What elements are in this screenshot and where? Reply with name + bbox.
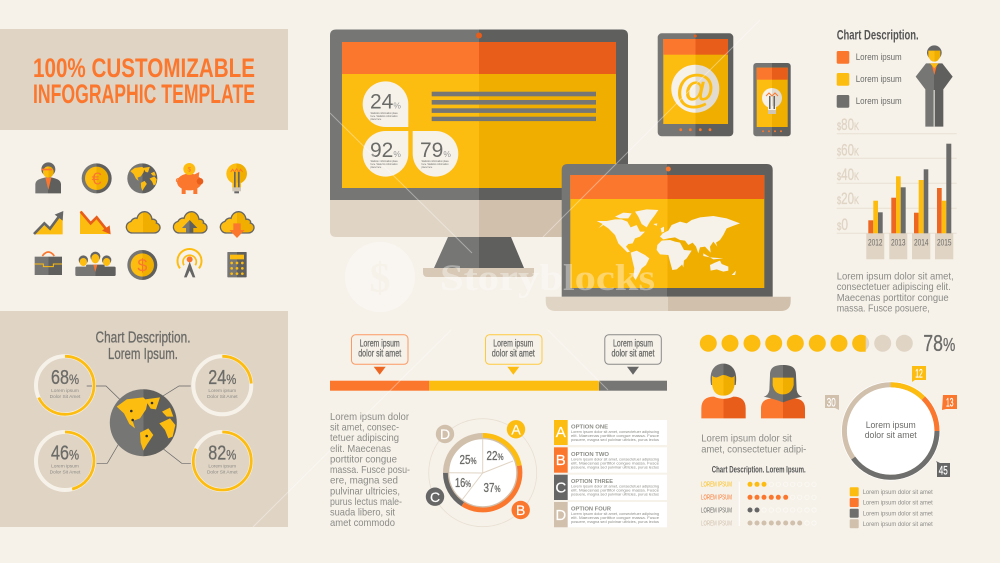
text block: chart description <box>837 270 954 314</box>
tag 30: 30 <box>827 398 836 410</box>
globe <box>110 389 177 456</box>
panel heading: Chart Description. <box>96 330 190 346</box>
icon: cloud upload <box>173 212 207 233</box>
ring legend: Lorem ipsum dolor sit amet <box>863 500 933 507</box>
y axis labels: $0 <box>837 215 848 234</box>
year label tabs: 2014 <box>914 238 928 248</box>
ring stat 82% <box>193 432 251 490</box>
option one: posuere, magna sed pulvinar ultricies, purus lectus <box>571 437 659 442</box>
ring stat 82%: Dolor Sit Amet <box>207 470 238 476</box>
ring legend: Lorem ipsum dolor sit amet <box>863 489 933 496</box>
ring segments <box>844 385 937 477</box>
rating row 1: LOREM IPSUM <box>701 482 732 489</box>
option four <box>554 502 667 527</box>
y axis labels <box>837 115 859 234</box>
option four: OPTION FOUR <box>571 506 611 512</box>
icon: dollar coin: $ <box>137 255 147 275</box>
panel heading <box>96 330 190 363</box>
title banner <box>0 29 288 130</box>
device: phone <box>753 63 791 136</box>
pie labels: 22% <box>486 448 504 463</box>
teardrop stat 79%: Statistics information place <box>422 160 450 163</box>
dot rating table: Chart Description. Lorem Ipsum. <box>712 465 806 476</box>
option three: elit. Maecenas porttitor congue massa. Fusce <box>571 488 659 492</box>
teardrop stat 79%: 79% <box>420 139 451 162</box>
tag 13: 13 <box>946 398 953 410</box>
rating row 4: LOREM IPSUM <box>701 521 732 528</box>
ring legend: Lorem ipsum dolor sit amet <box>863 521 933 528</box>
option one <box>554 420 667 445</box>
device: tablet <box>658 33 733 136</box>
icon grid <box>34 162 254 280</box>
ring stat 68%: Lorem ipsum <box>51 388 79 394</box>
ring stat 24%: 24% <box>208 367 236 389</box>
rating row 3: LOREM IPSUM <box>701 508 732 515</box>
teardrop stat 79% <box>413 131 458 177</box>
option one: OPTION ONE <box>571 424 608 430</box>
icon: team <box>75 252 116 276</box>
ring stat 82%: 82% <box>208 442 236 464</box>
watermark: Storyblocks <box>440 258 655 299</box>
icon: cloud download <box>220 212 254 238</box>
option one: elit. Maecenas porttitor congue massa. Fusce <box>571 433 659 438</box>
ring chart: Lorem ipsum <box>866 420 916 431</box>
callout: third: Lorem ipsum <box>613 338 653 350</box>
option three: Lorem ipsum dolor sit amet, consectetuer adipiscing <box>571 484 659 488</box>
teardrop stat 92%: 92% <box>370 139 401 162</box>
text block: left paragraph: massa. Fusce posu- <box>330 464 410 476</box>
teardrop stat 92% <box>363 131 408 177</box>
tag 13 <box>942 395 957 410</box>
text block: chart description: Lorem ipsum dolor sit amet, <box>837 270 954 282</box>
callout: first <box>352 335 408 375</box>
device: laptop <box>546 164 791 311</box>
badge D: D <box>440 426 450 442</box>
text block: left paragraph: ere, magna sed <box>330 475 398 487</box>
tag 45: 45 <box>939 466 948 478</box>
y axis labels: $20K <box>837 189 859 208</box>
year label tabs: 2013 <box>891 238 906 248</box>
panel: right chart legend: Chart Description. <box>837 26 919 42</box>
text block: people description <box>701 432 807 455</box>
option two: B <box>556 452 566 469</box>
ring stat 68%: Dolor Sit Amet <box>50 394 81 400</box>
callout: first: Lorem ipsum <box>360 338 400 350</box>
tag 12: 12 <box>915 368 923 380</box>
rating row 2: LOREM IPSUM <box>701 495 732 502</box>
icon: briefcase <box>35 252 62 275</box>
option four: Lorem ipsum dolor sit amet, consectetuer adipiscing <box>571 511 659 516</box>
teardrop stat 92%: place here <box>370 166 382 169</box>
ring chart: dolor sit amet <box>865 430 917 441</box>
ring chart <box>825 366 957 528</box>
y axis labels: $80K <box>837 115 859 134</box>
year label tabs: 2015 <box>937 238 951 248</box>
callout: third: dolor sit amet <box>612 348 655 360</box>
callout: second <box>486 335 542 375</box>
ring stat 24%: Lorem ipsum <box>208 388 236 394</box>
option three: C <box>555 480 566 496</box>
badge A: A <box>511 422 521 438</box>
text block: left paragraph: purus lectus male- <box>330 496 402 508</box>
y axis labels: $60K <box>837 140 859 160</box>
icon: calculator <box>227 252 247 277</box>
pie labels: 37% <box>484 480 500 495</box>
text block: chart description: massa. Fusce posuere, <box>837 302 930 314</box>
icon: antenna <box>177 249 201 277</box>
icon: dollar coin <box>127 250 157 280</box>
bar chart: yearly values <box>837 115 957 259</box>
icon: globe <box>127 163 157 193</box>
text block: left paragraph: suada libero, sit <box>330 506 395 518</box>
screen text lines <box>432 92 596 121</box>
icon: rising chart <box>34 211 63 234</box>
panel heading: Lorem Ipsum. <box>108 346 178 363</box>
icon: falling chart <box>80 211 111 234</box>
text block: left paragraph: elit. Maecenas <box>330 443 391 455</box>
pie labels: 25% <box>460 452 476 467</box>
watermark: $ <box>370 256 390 302</box>
badge C: C <box>430 489 440 505</box>
option four: elit. Maecenas porttitor congue massa. Fusce <box>571 515 659 520</box>
option three: posuere, magna sed pulvinar ultricies, purus lectus <box>571 492 659 497</box>
dot progress 78%: 78% <box>923 330 955 356</box>
icon: bulb <box>762 88 782 114</box>
panel: right chart legend: Lorem ipsum <box>856 52 902 62</box>
pie labels: 16% <box>455 475 471 490</box>
option one: Lorem ipsum dolor sit amet, consectetuer adipiscing <box>571 429 659 434</box>
text block: people description: amet, consectetuer adipi- <box>701 443 807 455</box>
callout: second: Lorem ipsum <box>493 338 533 350</box>
icon: businessman <box>35 162 61 193</box>
text block: left paragraph: pulvinar ultricies, <box>330 485 400 497</box>
option one: A <box>556 424 566 441</box>
callout: third <box>605 335 661 375</box>
teardrop stat 92%: here. Statistics information <box>370 163 398 166</box>
icon: cloud <box>126 212 160 233</box>
pie labels <box>455 448 504 495</box>
empty rating dots <box>762 482 816 525</box>
ring stat 46%: Dolor Sit Amet <box>50 470 81 476</box>
timeline <box>330 335 667 391</box>
panel: right chart legend: Lorem ipsum <box>856 74 902 84</box>
device: desktop monitor <box>330 30 628 277</box>
figure: man <box>701 364 746 418</box>
tag 45 <box>936 461 950 478</box>
text block: left paragraph <box>330 411 410 529</box>
ring stat 46%: 46% <box>51 442 79 464</box>
option two: elit. Maecenas porttitor congue massa. Fusce <box>571 460 659 465</box>
icon: at sign: @ <box>676 67 715 111</box>
connector lines <box>87 386 191 463</box>
ring legend <box>850 487 933 528</box>
text block: chart description: Maecenas porttitor congue <box>837 292 949 304</box>
text block: left paragraph: porttitor congue <box>330 454 397 466</box>
people figures <box>701 364 805 418</box>
teardrop stat 24%: place here <box>370 118 382 121</box>
ring stat 46% <box>36 432 94 490</box>
option two <box>554 447 667 473</box>
world map <box>597 209 740 280</box>
option three: OPTION THREE <box>571 479 613 485</box>
icon: piggy bank: $ <box>187 166 191 173</box>
option three <box>554 475 667 500</box>
teardrop stat 79%: here. Statistics information <box>422 163 449 166</box>
callout: second: dolor sit amet <box>492 348 535 360</box>
y axis labels: $40K <box>837 165 859 184</box>
text block: left paragraph: tetuer adipiscing <box>330 432 399 444</box>
option list <box>554 420 667 527</box>
figure: standing businessman <box>916 45 953 127</box>
text block: left paragraph: sit amet, consec- <box>330 422 399 434</box>
watermark <box>253 20 760 527</box>
pie chart with options <box>426 419 537 527</box>
option four: posuere, magna sed pulvinar ultricies, purus lectus <box>571 519 659 524</box>
callout: first: dolor sit amet <box>358 348 401 360</box>
text block: left paragraph: Lorem ipsum dolor <box>330 411 409 423</box>
bars <box>868 144 951 233</box>
teardrop stat 24% <box>363 81 408 127</box>
year label tabs: 2012 <box>868 238 883 248</box>
ring stat 24%: Dolor Sit Amet <box>207 394 238 400</box>
ring stat 68%: 68% <box>51 367 79 389</box>
teardrop stat 24%: 24% <box>370 90 401 114</box>
text block: people description: Lorem ipsum dolor sit <box>701 432 792 444</box>
segmented bar <box>330 381 667 391</box>
icon: light bulb <box>226 163 247 193</box>
text block: chart description: consectetuer adipiscing elit. <box>837 281 951 293</box>
teardrop stat 92%: Statistics information place <box>370 160 399 163</box>
ring stat 82%: Lorem ipsum <box>208 464 236 470</box>
option two: OPTION TWO <box>571 452 610 458</box>
tag 30 <box>825 395 839 410</box>
panel: globe statistics <box>0 311 288 527</box>
teardrop stat 24%: Statistics information place <box>370 112 399 115</box>
ring legend: Lorem ipsum dolor sit amet <box>863 510 933 517</box>
tag 12 <box>912 366 926 382</box>
text block: left paragraph: amet commodo <box>330 517 395 529</box>
ring stat 24% <box>193 356 251 414</box>
ring stat 46%: Lorem ipsum <box>51 464 79 470</box>
ring stat 68% <box>36 356 94 414</box>
icon: piggy bank <box>176 163 203 194</box>
icon: euro coin <box>82 163 112 193</box>
panel: right chart legend <box>837 26 919 108</box>
year label tabs <box>866 233 953 259</box>
panel: right chart legend: Lorem ipsum <box>856 96 902 106</box>
dot rating table <box>701 465 816 528</box>
teardrop stat 79%: place here <box>422 166 433 169</box>
title banner: 100% CUSTOMIZABLE <box>33 53 255 83</box>
option two: posuere, magna sed pulvinar ultricies, purus lectus <box>571 464 659 470</box>
ring segments <box>445 435 520 510</box>
option two: Lorem ipsum dolor sit amet, consectetuer adipiscing <box>571 456 659 461</box>
teardrop stat 24%: here. Statistics information <box>370 115 398 118</box>
badge B: B <box>516 502 525 518</box>
title banner: INFOGRAPHIC TEMPLATE <box>33 79 255 109</box>
dot progress 78% <box>700 330 955 356</box>
option four: D <box>555 507 566 524</box>
icon: euro coin: € <box>92 169 102 189</box>
figure: woman <box>761 365 805 418</box>
